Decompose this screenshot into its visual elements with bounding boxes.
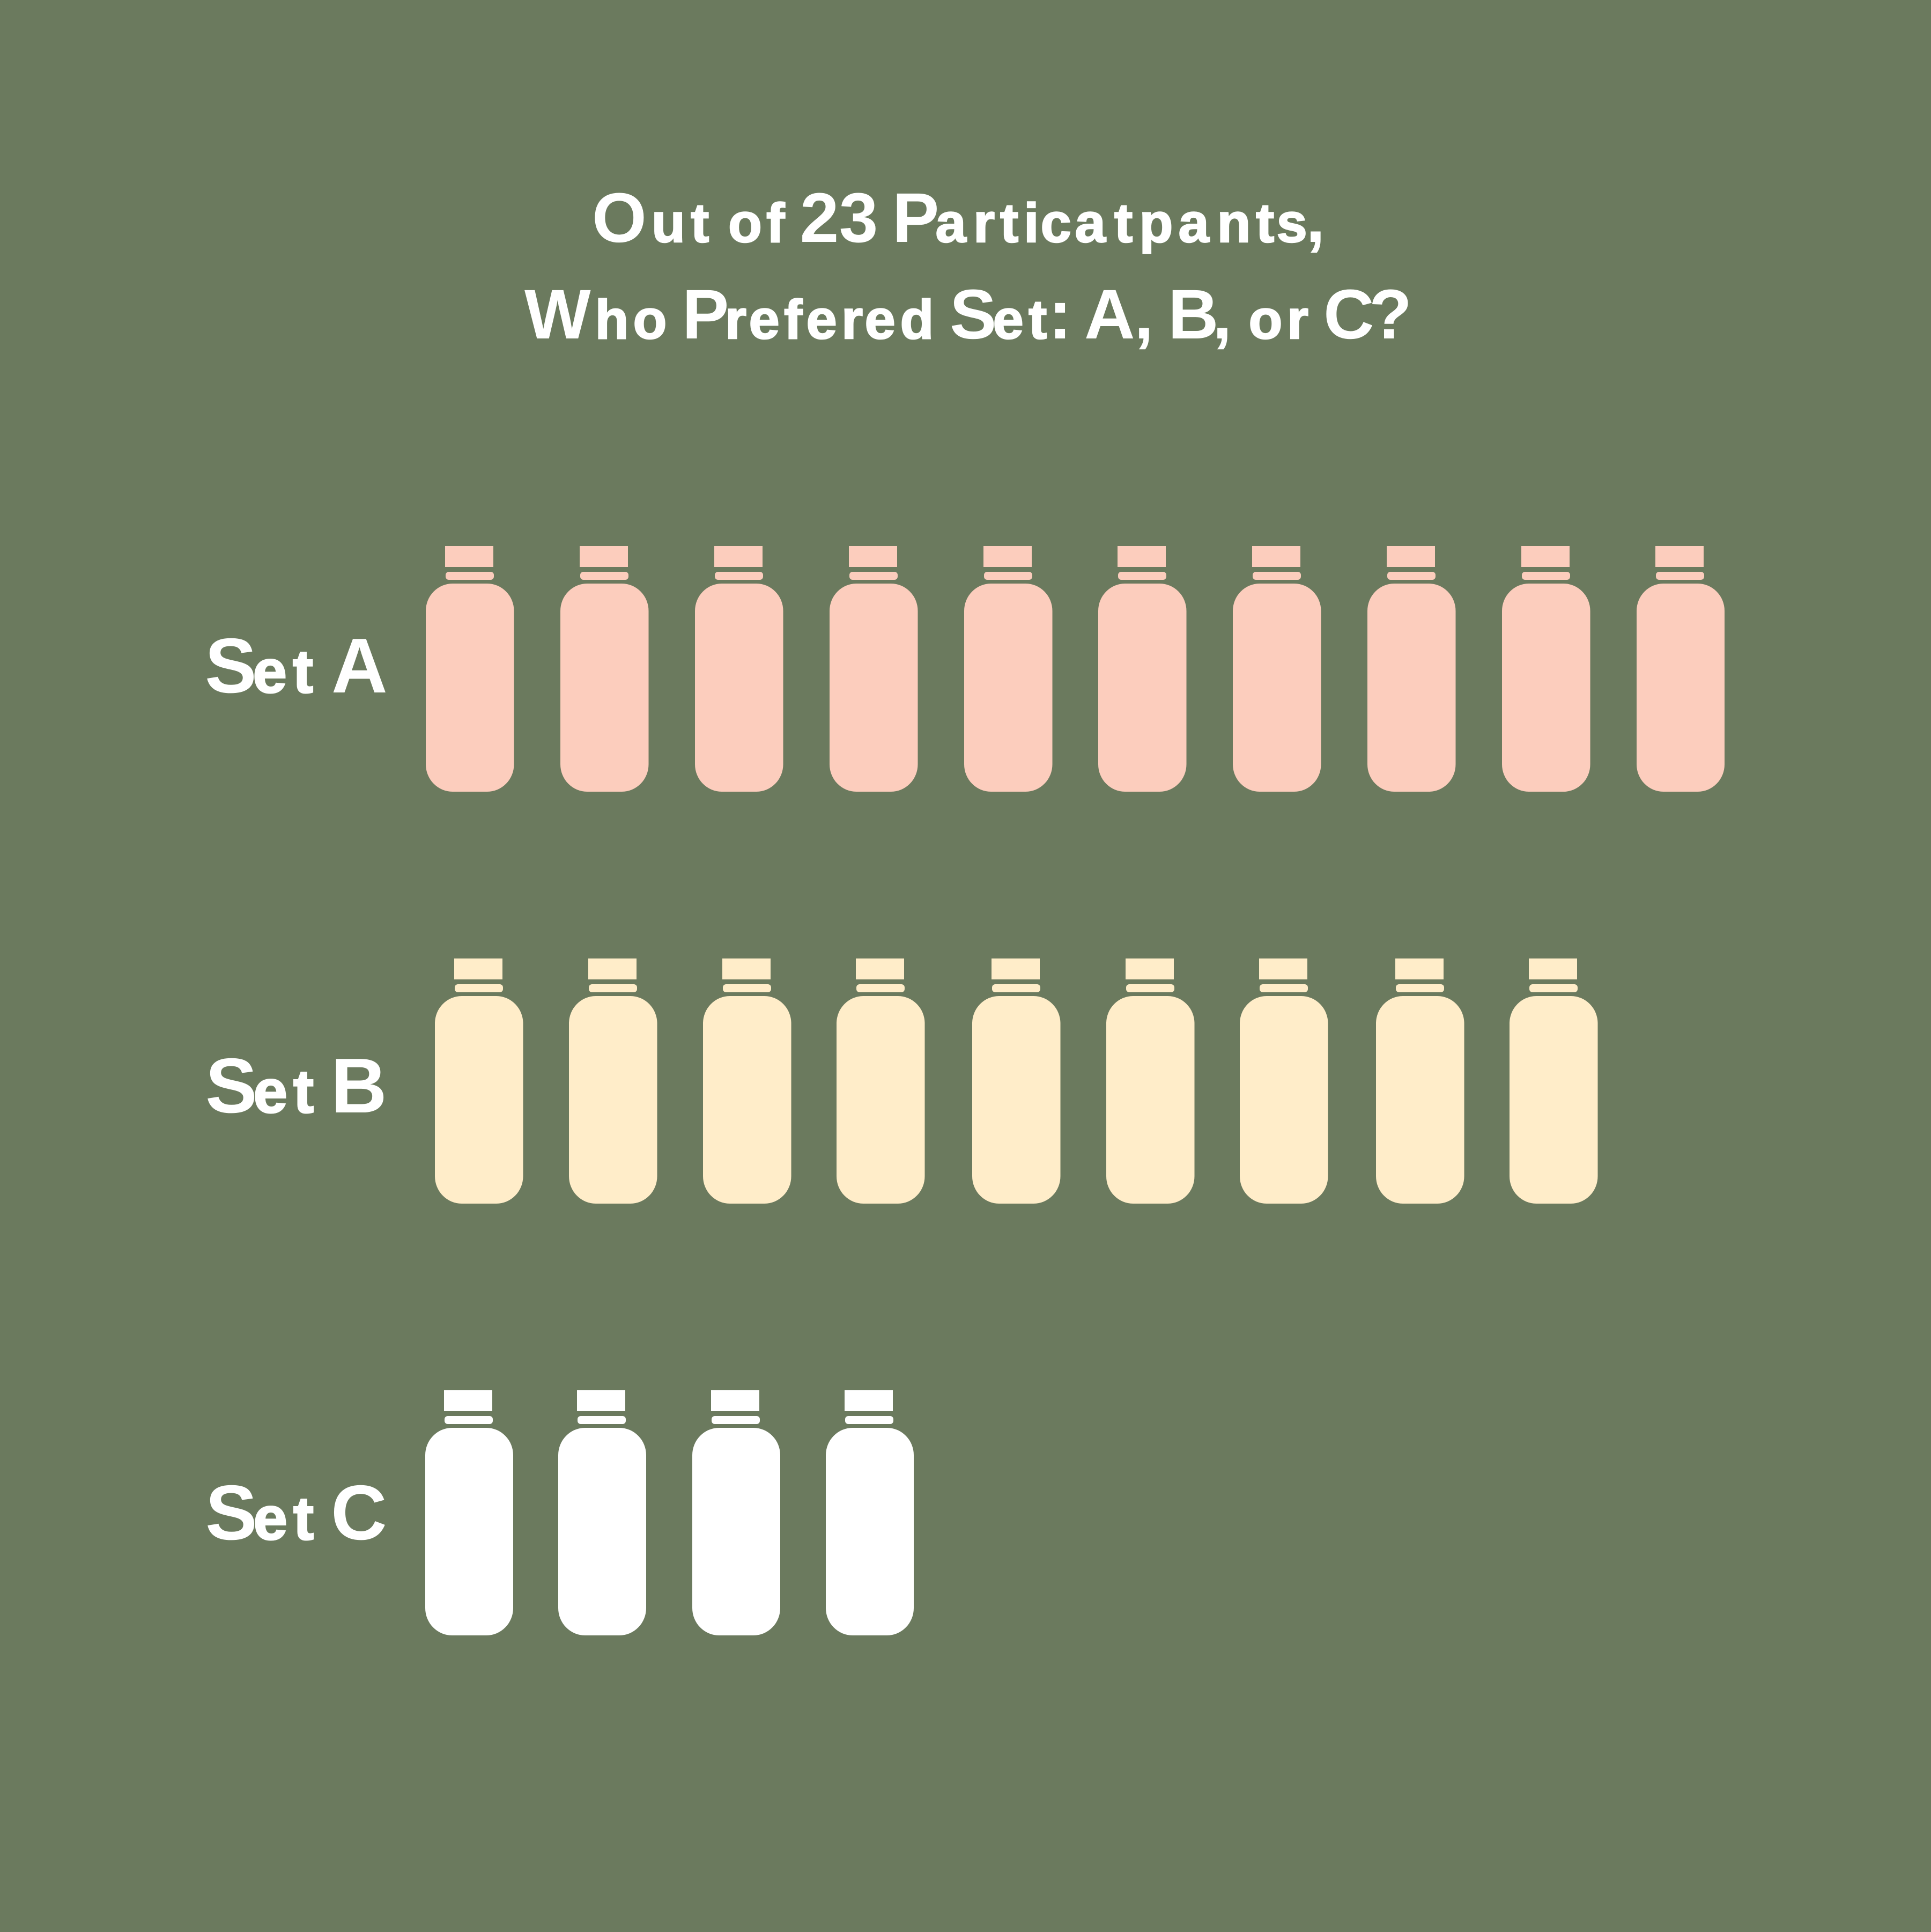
label: Set C: [205, 1469, 387, 1556]
bottle B1: [435, 958, 523, 1204]
bottle B9: [1510, 958, 1598, 1204]
label: Set B: [205, 1042, 387, 1129]
label: Set C: et: [253, 1485, 314, 1553]
title: et: [993, 289, 1047, 350]
title: C?: [1323, 275, 1412, 353]
title: [524, 178, 1412, 353]
title: ,: [1306, 178, 1325, 257]
title: W: [524, 275, 591, 353]
bottle B5: [972, 958, 1061, 1204]
title: S: [950, 275, 996, 353]
bottle B7: [1240, 958, 1328, 1204]
bottle B4: [837, 958, 924, 1204]
row: Set A bottles: [426, 546, 1725, 792]
bottle A1: [426, 546, 514, 792]
title: refered: [725, 289, 934, 350]
bottle C3: [692, 1390, 780, 1635]
title: ho: [595, 289, 667, 350]
title: ut: [652, 192, 709, 254]
row: Set B bottles: [435, 958, 1598, 1204]
label: Set B: et: [253, 1058, 314, 1126]
bottle B8: [1376, 958, 1464, 1204]
bottle A6: [1098, 546, 1186, 792]
title: P: [682, 275, 729, 353]
bottle A10: [1637, 546, 1725, 792]
title: articatpants: [935, 192, 1307, 254]
label: Set A: S: [205, 622, 257, 709]
title: of: [728, 192, 785, 254]
bottle B3: [703, 958, 791, 1204]
bottle A9: [1502, 546, 1590, 792]
bottle A3: [695, 546, 783, 792]
bottle C1: [425, 1390, 513, 1635]
label: Set A: [205, 622, 388, 709]
bottle A4: [830, 546, 918, 792]
bottle C4: [826, 1390, 914, 1635]
label: Set B: B: [331, 1042, 387, 1129]
title: or: [1248, 289, 1308, 350]
bottle B2: [569, 958, 657, 1204]
title: A,: [1084, 275, 1153, 353]
bottle A7: [1233, 546, 1321, 792]
bottle A2: [560, 546, 649, 792]
bottle B6: [1106, 958, 1195, 1204]
bottle C2: [558, 1390, 646, 1635]
bottle A8: [1367, 546, 1455, 792]
bottle A5: [964, 546, 1052, 792]
title: 23: [800, 178, 878, 257]
label: Set A: A: [331, 622, 388, 709]
title: O: [592, 178, 647, 257]
title: :: [1048, 275, 1072, 353]
title: P: [892, 178, 939, 257]
title: B,: [1168, 275, 1232, 353]
label: Set A: et: [253, 638, 313, 706]
label: Set B: S: [205, 1042, 257, 1129]
label: Set C: S: [205, 1469, 257, 1556]
label: Set C: C: [331, 1469, 387, 1556]
row: Set C bottles: [425, 1390, 914, 1635]
